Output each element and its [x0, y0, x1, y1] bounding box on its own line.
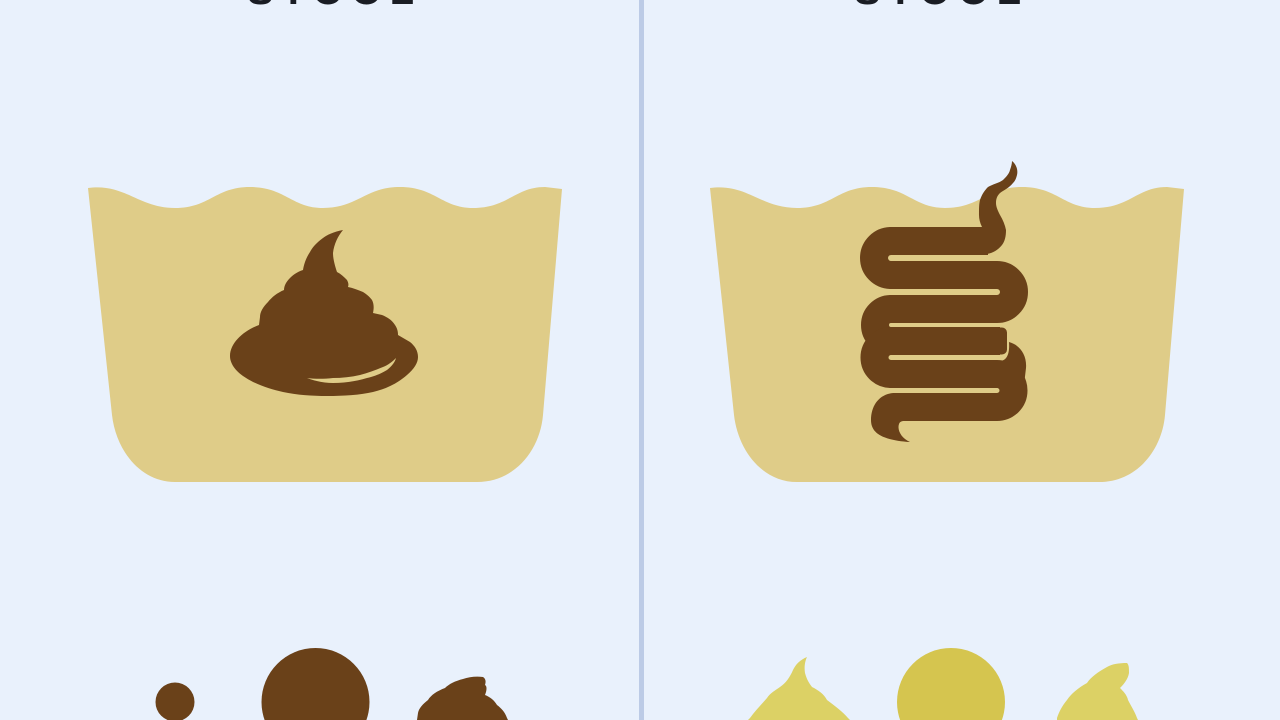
icon: small brown ball: [156, 682, 194, 720]
icon: yellow pile left: [748, 657, 850, 720]
panel: left water basin with stool: [88, 187, 562, 482]
icon: brown soft pile: [417, 677, 508, 720]
icon: large brown ball: [262, 648, 370, 720]
icon: intestine shaped stool: [871, 161, 1026, 442]
center divider: [639, 0, 644, 720]
icon: stool pile: [230, 230, 418, 396]
icon: left basin: [88, 187, 562, 482]
panel: right water basin with intestine: [710, 161, 1184, 482]
icon: yellow pile right: [1057, 663, 1138, 720]
icon: stool highlight: [307, 358, 396, 383]
icon: yellow ball: [897, 648, 1005, 720]
icon: right basin: [710, 187, 1184, 482]
